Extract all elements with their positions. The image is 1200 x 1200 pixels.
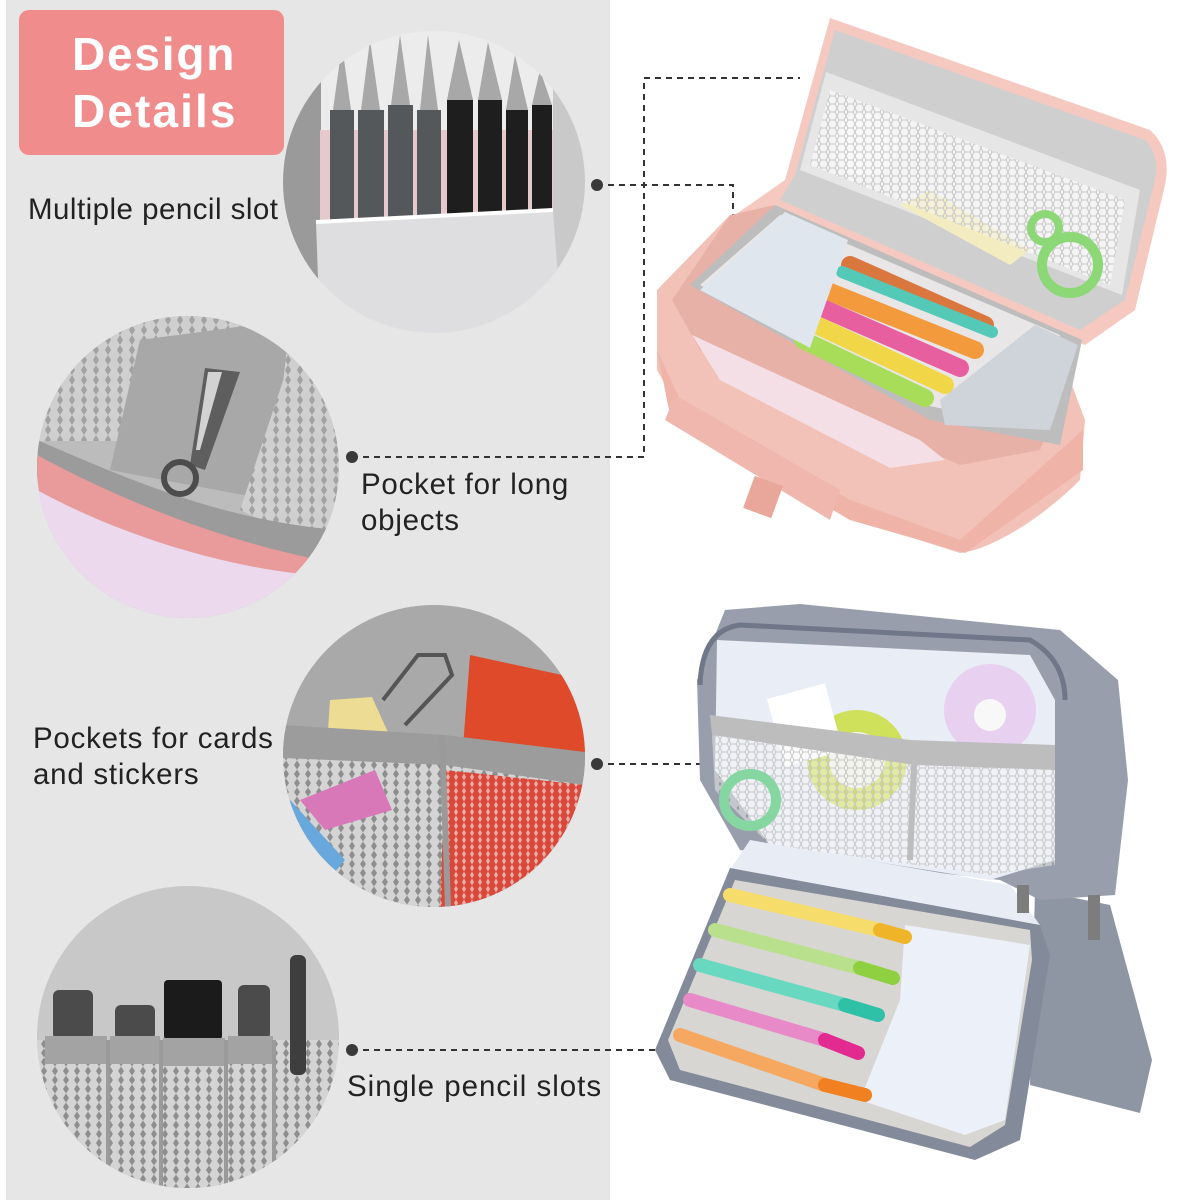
label: Pockets for cards and stickers: Pockets for cards bbox=[33, 722, 274, 755]
label: Pocket for long objects: Pocket for long bbox=[361, 468, 569, 501]
label: Pocket for long objects: objects bbox=[361, 504, 460, 537]
label: Multiple pencil slot: Multiple pencil slot bbox=[28, 193, 278, 226]
label: Single pencil slots: Single pencil slots bbox=[347, 1070, 602, 1103]
detail circle: zipper pocket bbox=[37, 316, 345, 618]
product: pink pencil case bbox=[657, 18, 1167, 553]
badge: Design Details: Design bbox=[72, 28, 236, 80]
detail circle: pencil slots bbox=[283, 36, 585, 282]
leader lines bbox=[352, 78, 800, 1050]
badge: Design Details: Details bbox=[72, 85, 238, 137]
badge: Design Details bbox=[19, 10, 284, 155]
detail circle: single pencil slots bbox=[37, 886, 339, 1188]
label: Pockets for cards and stickers: and stickers bbox=[33, 758, 199, 791]
label: Pockets for cards and stickers bbox=[33, 722, 274, 791]
background panel bbox=[6, 0, 610, 1200]
product: gray pencil case bbox=[655, 604, 1152, 1160]
detail circle: card pockets bbox=[283, 605, 585, 907]
label: Pocket for long objects bbox=[361, 468, 569, 537]
